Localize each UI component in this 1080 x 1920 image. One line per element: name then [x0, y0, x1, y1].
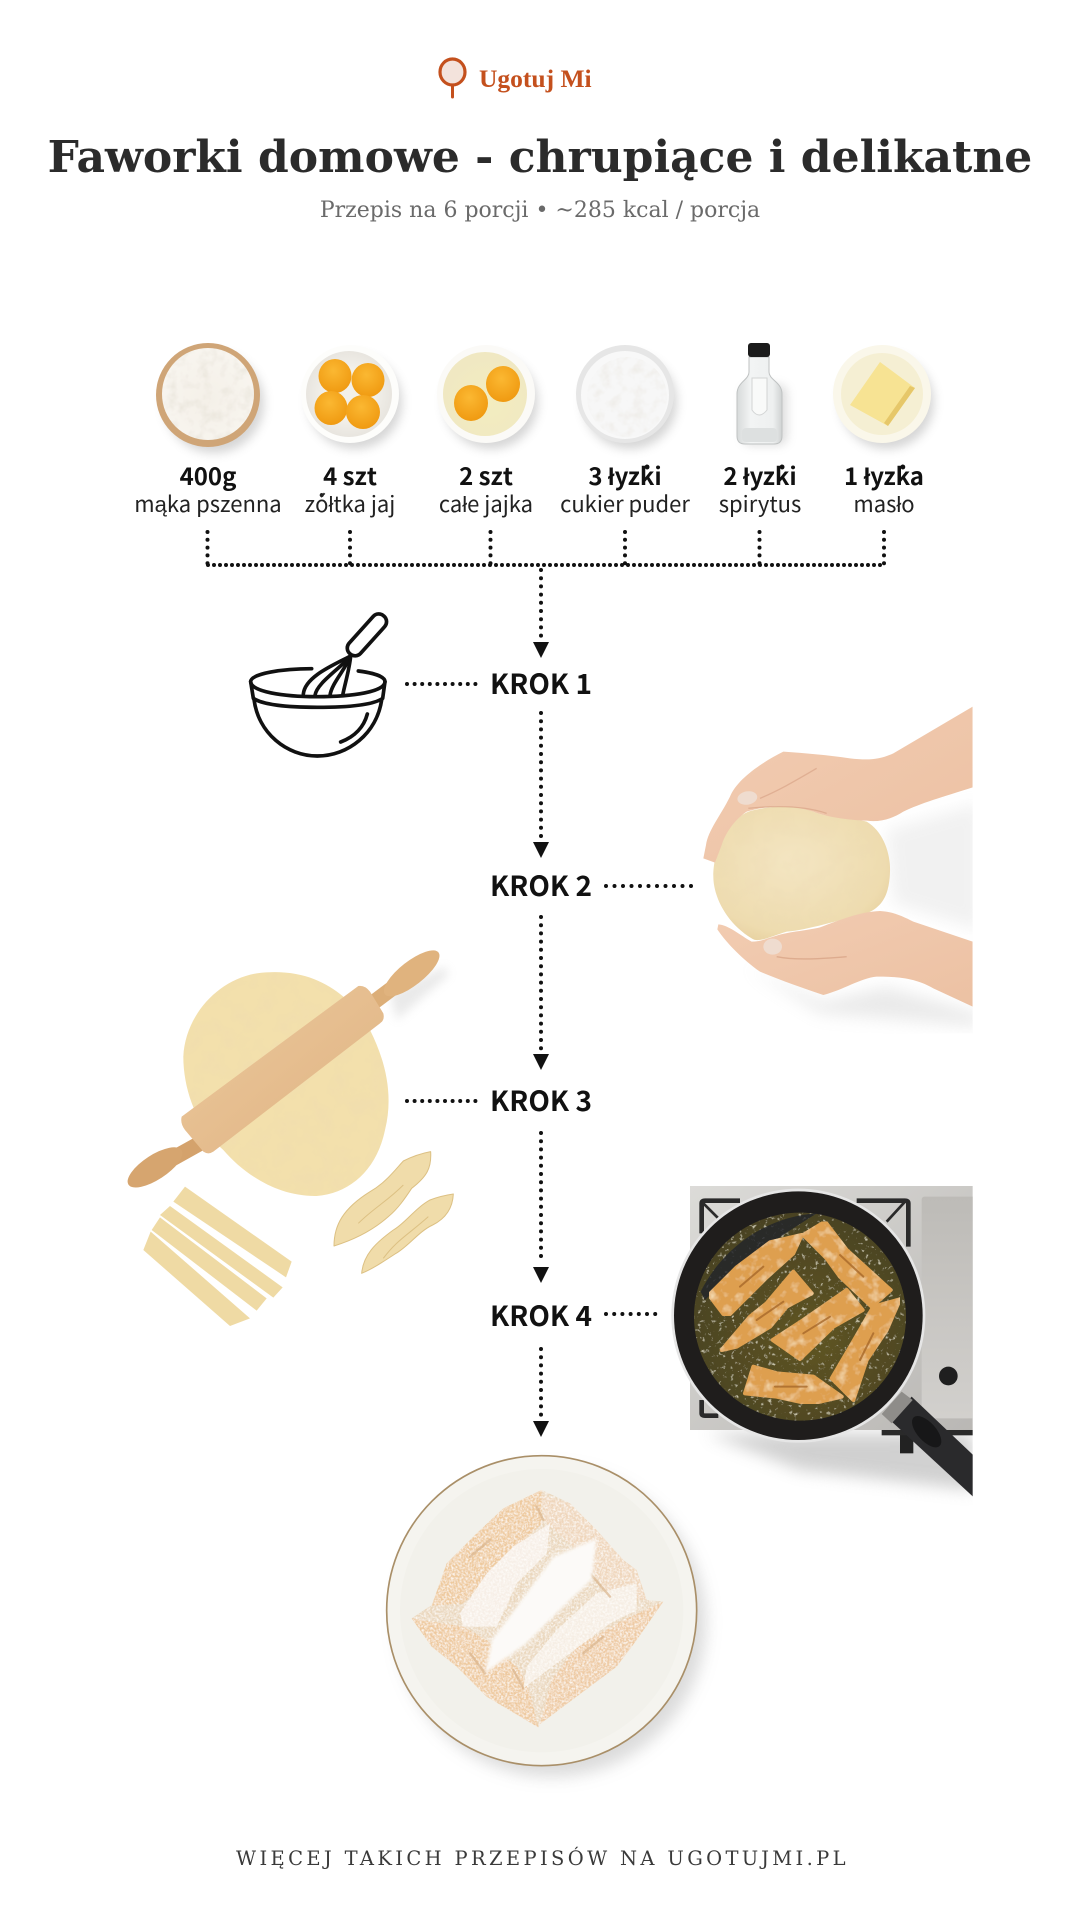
- ingredient labels: 400g: [180, 457, 236, 492]
- ingredient labels: cukier puder: [560, 487, 690, 519]
- ingredient labels: 2 łyżki: [723, 457, 797, 492]
- footer: WIĘCEJ TAKICH PRZEPISÓW NA UGOTUJMI.PL: [236, 1845, 849, 1870]
- dotted link: step 2: [606, 884, 692, 888]
- ingredient labels: żółtka jaj: [305, 487, 395, 519]
- photo: plate of faworki with powdered sugar: [387, 1456, 706, 1777]
- twisted pastry: [334, 1152, 453, 1273]
- logo: [440, 59, 592, 97]
- subtitle: Przepis na 6 porcji • ~285 kcal / porcja: [320, 198, 760, 223]
- icon: bottle of spirit: [737, 343, 787, 445]
- dotted connector from ingredients: [208, 532, 885, 565]
- rolling pin: [122, 943, 446, 1195]
- title: Faworki domowe - chrupiące i delikatne: [48, 132, 1032, 183]
- icon: flour bowl: [156, 343, 264, 453]
- crevices between pastries: [470, 1507, 610, 1688]
- icon: egg yolks bowl: [301, 345, 402, 449]
- ingredient labels: [134, 457, 924, 519]
- ingredient labels: całe jajka: [439, 487, 533, 519]
- ingredient labels: 4 szt: [323, 457, 377, 492]
- ingredient labels: spirytus: [719, 487, 801, 519]
- icon: butter plate: [833, 345, 934, 449]
- arrow: ingredients to step 1: [533, 570, 549, 658]
- strips: [143, 1187, 292, 1326]
- ingredient labels: masło: [853, 487, 915, 519]
- dotted link: step 3: [407, 1099, 476, 1103]
- icon: spoon logo: [440, 59, 465, 97]
- pan: [671, 1189, 925, 1443]
- icon: whisk and bowl: [251, 611, 390, 756]
- panel: ingredients: [134, 343, 934, 565]
- arrow: step 4 to plate: [533, 1349, 549, 1437]
- dotted link: step 1: [407, 682, 476, 686]
- icon: whole eggs bowl: [437, 345, 538, 449]
- sugared top pastry: [485, 1538, 597, 1673]
- step 4 label: KROK 4: [490, 1295, 592, 1335]
- brand name: Ugotuj Mi: [479, 64, 592, 93]
- step 3 label: KROK 3: [490, 1080, 592, 1120]
- arrow: step 1 to step 2: [533, 713, 549, 858]
- ingredient labels: 2 szt: [459, 457, 513, 492]
- fried pastries: [709, 1222, 900, 1404]
- ingredient labels: 3 łyżki: [588, 457, 662, 492]
- dotted link: step 4: [606, 1312, 656, 1316]
- ingredient labels: 1 łyżka: [844, 457, 924, 492]
- step 1 label: KROK 1: [490, 663, 592, 703]
- ingredient labels: mąka pszenna: [134, 487, 282, 519]
- step 2 label: KROK 2: [490, 865, 592, 905]
- handle: [892, 1396, 973, 1496]
- photo: hands shaping dough: [703, 707, 980, 1027]
- photo: rolling pin, dough and strips: [122, 943, 453, 1326]
- fried pastry pile: [412, 1490, 663, 1727]
- icon: powdered sugar bowl: [576, 345, 677, 449]
- dough sheet: [183, 972, 389, 1196]
- arrow: step 3 to step 4: [533, 1133, 549, 1283]
- arrow: step 2 to step 3: [533, 917, 549, 1070]
- photo: frying faworki in a pan on a stove: [671, 1186, 977, 1500]
